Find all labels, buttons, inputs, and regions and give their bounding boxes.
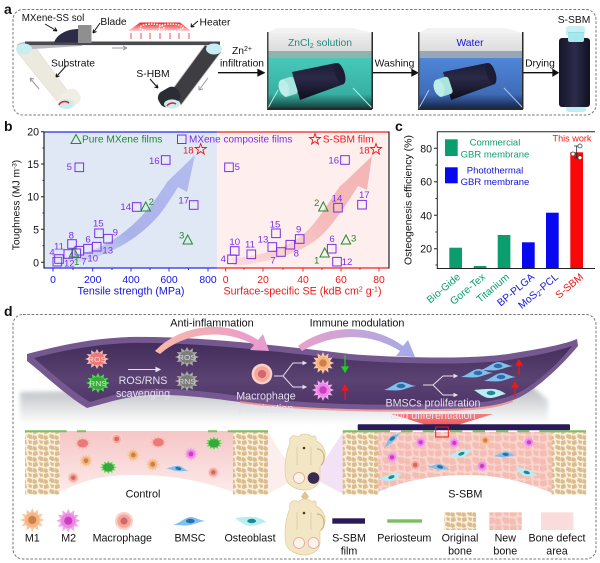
- conveyor: substrate strip: [17, 47, 67, 101]
- label BMSCs proliferation: BMSCs proliferation: [385, 398, 481, 410]
- scatter right: surface-specific SE: 2: [314, 198, 319, 209]
- y tick labels: 0: [33, 257, 39, 269]
- S-SBM roll: [559, 26, 590, 112]
- label anti-inflammation: Anti-inflammation: [170, 318, 254, 330]
- legend commercial: Commercial: [470, 138, 520, 148]
- S-SBM treated section: [343, 424, 586, 494]
- x category labels: [425, 271, 586, 312]
- scatter left: tensile strength: [49, 144, 206, 270]
- legend: BMSC: [173, 517, 206, 544]
- tank: ZnCl2: [267, 28, 373, 110]
- red trend arrow: [232, 156, 372, 266]
- scatter right: surface-specific SE: 9: [296, 224, 301, 235]
- panel label d: d: [4, 303, 13, 319]
- x category labels: MoS: [517, 289, 540, 312]
- legend: composite: MXene composite films: [189, 134, 292, 146]
- panel c: bar chart: [395, 118, 595, 312]
- scatter right: surface-specific SE: 15: [270, 219, 280, 230]
- bars: [449, 152, 583, 268]
- scatter left: tensile strength: 6: [85, 235, 91, 246]
- blue trend arrow: [56, 155, 195, 267]
- legend: macrophage: Macrophage: [93, 532, 152, 544]
- scatter right: surface-specific SE: 10: [229, 237, 240, 248]
- legend: S-SBM film: film: [341, 546, 357, 558]
- x tick labels SE: 20: [257, 275, 269, 286]
- y tick labels: 20: [27, 126, 39, 138]
- M2 cell: [312, 379, 334, 401]
- skull upper with implant: [285, 434, 325, 490]
- panel label b: b: [4, 118, 13, 134]
- legend: M1: M1: [25, 532, 40, 544]
- x tick labels strength: 800: [199, 275, 217, 286]
- panel a dashed frame: [13, 10, 596, 115]
- scatter right: surface-specific SE: 16: [328, 155, 339, 166]
- skull projection wedges: [268, 432, 343, 494]
- x category labels: Gore-Tex: [448, 271, 489, 308]
- scavenged ROS: ROS: [178, 354, 196, 362]
- label Blade: Blade: [100, 17, 127, 28]
- control defect section: [25, 431, 268, 494]
- panel label a: a: [4, 1, 12, 17]
- label S-SBM section: S-SBM: [448, 488, 482, 500]
- scavenged RNS: RNS: [178, 378, 196, 386]
- scatter left: tensile strength: 8: [69, 231, 74, 242]
- x category labels: S-SBM: [554, 272, 586, 301]
- x tick labels strength: 600: [160, 275, 178, 286]
- panel label c: c: [395, 118, 403, 134]
- legend: periosteum: [377, 519, 431, 544]
- red up arrows: [512, 360, 522, 397]
- proliferated cells: [461, 362, 516, 398]
- y tick labels: 60: [420, 177, 432, 189]
- scatter right: surface-specific SE: 4: [221, 254, 227, 265]
- x tick labels SE: [223, 275, 385, 286]
- RNS burst: RNS: [89, 380, 107, 388]
- legend: new bone: bone: [493, 546, 517, 558]
- label polarization: polarization: [239, 403, 293, 415]
- label MXene-SS sol: MXene-SS sol: [22, 13, 84, 24]
- x tick labels strength: 0: [50, 275, 56, 286]
- x axis title SE: g: [363, 286, 372, 298]
- panel b: scatter plots: [4, 118, 389, 298]
- x tick labels SE: 80: [373, 275, 385, 286]
- y tick labels: [27, 126, 39, 269]
- label Zn infiltration: infiltration: [220, 58, 264, 70]
- y tick labels: 15: [27, 159, 39, 171]
- y axis title: ): [12, 160, 22, 163]
- arrow washing: [373, 70, 418, 76]
- y tick labels: 20: [420, 244, 432, 256]
- x axis title strength: Tensile strength (MPa): [78, 286, 184, 298]
- label ROS/RNS scavenging: ROS/RNS: [119, 375, 167, 387]
- scatter left: tensile strength: 18: [183, 145, 194, 156]
- x category labels: BP-PLGA: [496, 272, 537, 309]
- direction arrows: [30, 46, 208, 90]
- x category labels: Titanium: [475, 272, 512, 305]
- scatter right: surface-specific SE: [221, 144, 382, 268]
- legend: S-SBM: S-SBM film: [323, 134, 374, 146]
- label Washing: Washing: [375, 58, 415, 70]
- label Heater: Heater: [200, 18, 231, 28]
- scatter right: surface-specific SE: 3: [351, 233, 356, 244]
- error bar and data points: [571, 144, 582, 160]
- scatter right: surface-specific SE: 13: [258, 234, 268, 245]
- legend: original bone: Original: [442, 532, 478, 544]
- scatter left: tensile strength: 5: [67, 162, 72, 173]
- MXene dome and blade: [54, 25, 92, 43]
- heater: [128, 22, 191, 39]
- scatter left: tensile strength: 9: [113, 228, 118, 239]
- legend: periosteum: Periosteum: [377, 532, 431, 544]
- scatter left: tensile strength: 14: [120, 202, 132, 213]
- label immune modulation: Immune modulation: [310, 318, 404, 330]
- x tick labels strength: [50, 275, 217, 286]
- shadow under band: [20, 385, 548, 424]
- scatter left: tensile strength: 17: [178, 195, 189, 206]
- scatter left: tensile strength: 15: [93, 219, 104, 230]
- y tick labels: 5: [33, 224, 39, 236]
- x tick labels strength: 400: [122, 275, 140, 286]
- panel a: fabrication process: [4, 1, 596, 115]
- scavenging arrow: [128, 368, 160, 372]
- label Zn2+: Zn: [232, 46, 244, 57]
- scatter right: surface-specific SE: 14: [332, 193, 343, 204]
- legend: original bone: [442, 512, 478, 558]
- legend commercial: [445, 138, 529, 160]
- y axis title: -3: [12, 163, 18, 169]
- label macrophage polarization: Macrophage: [236, 390, 296, 402]
- callout this work: This work: [553, 134, 592, 144]
- conveyor: coated strip: [172, 45, 221, 105]
- scatter left: tensile strength: 7: [81, 257, 87, 268]
- BMSC in band: [384, 382, 416, 390]
- scatter left: tensile strength: 4: [49, 248, 55, 259]
- tank label ZnCl2 solution: ZnCl: [288, 38, 310, 49]
- scatter right: surface-specific SE: 5: [235, 162, 240, 173]
- scatter right: surface-specific SE: 7: [270, 255, 276, 266]
- scatter right: surface-specific SE: 6: [329, 234, 335, 245]
- scavenged ROS: [175, 347, 199, 367]
- label Drying: Drying: [525, 58, 555, 70]
- legend: S-SBM film: S-SBM: [332, 532, 366, 544]
- macrophage cell: [252, 364, 272, 384]
- legend: bone defect area: [528, 512, 586, 558]
- x axis title SE: ): [378, 286, 382, 298]
- skull lower: [285, 499, 325, 555]
- x tick labels SE: 60: [335, 275, 347, 286]
- axes: [41, 132, 389, 272]
- legend: bone defect area: Bone defect: [528, 532, 586, 544]
- x axis title SE: Surface-specific SE (kdB cm: [223, 286, 359, 298]
- scatter left: tensile strength: 11: [54, 241, 64, 252]
- legend: M2: M2: [61, 532, 76, 544]
- pointer arrows: [45, 21, 198, 88]
- y axis title: Osteogenesis efficiency (%): [402, 135, 414, 265]
- panel d: mechanism: [4, 303, 596, 559]
- legend: S-SBM film: [332, 518, 366, 558]
- M1 cell: [312, 352, 334, 374]
- tank: water: [418, 28, 524, 110]
- legend commercial: GBR membrane: [461, 150, 529, 160]
- legend photothermal: Photothermal: [467, 166, 523, 176]
- legend: macrophage: [93, 512, 152, 544]
- purple tissue band: [27, 337, 578, 411]
- scatter left: tensile strength: 1: [74, 257, 79, 268]
- RNS burst: [86, 373, 110, 393]
- axes: [434, 132, 595, 268]
- substrate roller: [56, 86, 83, 112]
- x category labels: 2: [536, 290, 543, 298]
- y tick labels: 10: [27, 192, 39, 204]
- y tick labels: 40: [420, 210, 432, 222]
- red up arrow: [342, 385, 348, 400]
- macrophage fork arrows: [274, 362, 306, 388]
- legend photothermal: GBR membrane: [461, 177, 529, 188]
- arrow immune modulation: [298, 329, 415, 357]
- ROS burst: [85, 349, 109, 369]
- tank label ZnCl2 solution: solution: [314, 38, 352, 49]
- label differentiation: and differentiation: [391, 410, 475, 422]
- scavenged RNS: [175, 371, 199, 391]
- arrow infiltration: [218, 70, 264, 76]
- legend: pure MXene: Pure MXene films: [82, 134, 162, 146]
- y axis title: Toughness (MJ m: [12, 169, 22, 250]
- x tick labels SE: 0: [223, 275, 229, 286]
- label scavenging: scavenging: [116, 388, 170, 400]
- green down arrow: [342, 355, 348, 372]
- legend: osteoblast: [224, 517, 276, 544]
- legend photothermal: [445, 166, 529, 188]
- scatter left: tensile strength: 3: [179, 230, 184, 241]
- label S-SBM: S-SBM: [558, 15, 590, 26]
- label control: Control: [126, 488, 160, 500]
- tank label ZnCl2 solution: 2: [310, 43, 314, 50]
- panel d dashed frame: [13, 314, 596, 559]
- label Substrate: Substrate: [51, 58, 95, 70]
- legend: new bone: [489, 512, 522, 558]
- label Zn2+: 2+: [244, 46, 252, 53]
- tank label Water: Water: [456, 38, 484, 49]
- scatter left: tensile strength: 12: [64, 259, 75, 270]
- scatter left: tensile strength: 10: [87, 253, 98, 264]
- label S-HBM: S-HBM: [136, 69, 170, 80]
- scatter left: tensile strength: 16: [149, 156, 160, 167]
- legend: BMSC: BMSC: [175, 532, 206, 544]
- scatter right: surface-specific SE: 8: [294, 249, 299, 260]
- arrow anti-inflammation: [155, 327, 269, 354]
- scatter right: surface-specific SE: 12: [342, 257, 352, 268]
- legend: new bone: New: [495, 532, 516, 544]
- red glow to defect site: [391, 414, 493, 428]
- legend: osteoblast: Osteoblast: [224, 532, 276, 544]
- ROS burst: ROS: [88, 356, 106, 364]
- scatter left: tensile strength: 2: [149, 197, 154, 208]
- x axis title SE: -1: [372, 286, 378, 294]
- scatter left: tensile strength: 13: [102, 245, 113, 256]
- legend: M2: [56, 509, 80, 544]
- x category labels: Bio-Gide: [425, 272, 463, 306]
- x category labels: -PCL: [536, 272, 561, 295]
- legend: original bone: bone: [448, 546, 472, 558]
- y tick labels: 80: [420, 143, 432, 155]
- scatter right: surface-specific SE: 11: [245, 240, 255, 251]
- x tick labels strength: 200: [84, 275, 102, 286]
- x axis title SE: 2: [359, 286, 363, 294]
- scatter right: surface-specific SE: 18: [359, 145, 370, 156]
- y tick labels: [420, 143, 432, 256]
- legend: M1: [20, 508, 44, 544]
- scatter right: surface-specific SE: 1: [314, 256, 319, 267]
- connector arrow: [302, 492, 308, 501]
- plot backgrounds: [44, 132, 389, 268]
- legend: bone defect area: area: [546, 546, 568, 558]
- S-HBM roller: [155, 84, 183, 110]
- BMSC fork arrows: [423, 374, 457, 396]
- conveyor top belt: [16, 42, 222, 54]
- x tick labels SE: 40: [297, 275, 309, 286]
- arrow drying: [523, 70, 558, 76]
- scatter right: surface-specific SE: 17: [359, 190, 370, 201]
